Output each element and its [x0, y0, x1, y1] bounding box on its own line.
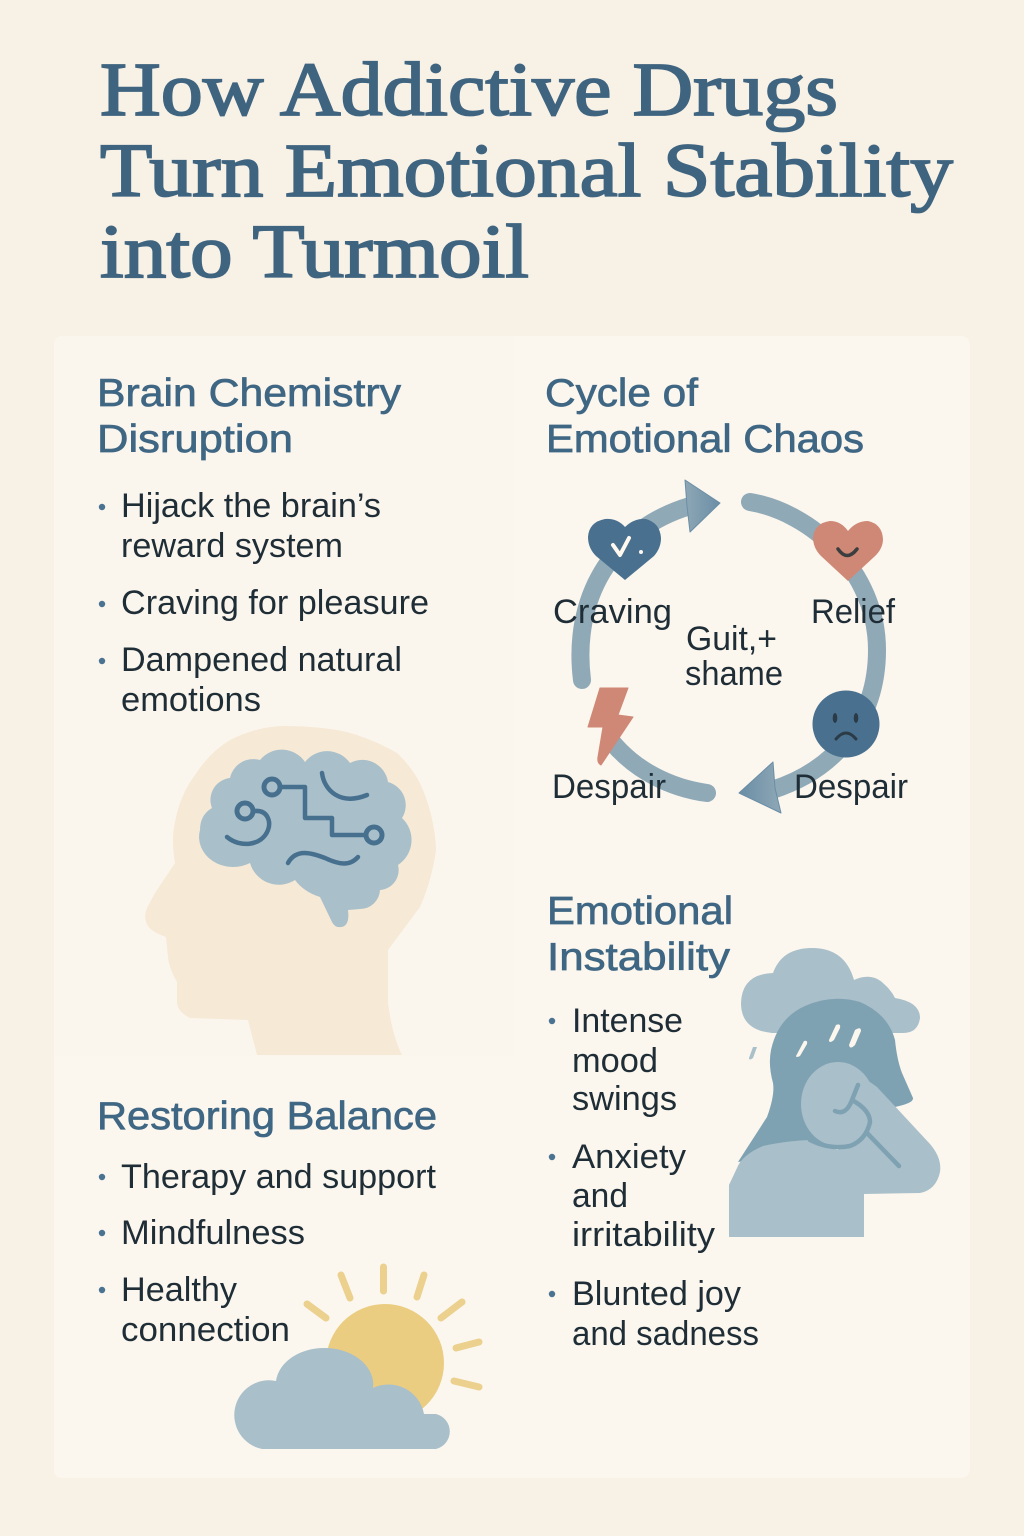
cycle labels: Relief	[811, 593, 896, 631]
cycle labels	[552, 593, 908, 806]
bullet list: brain chemistry	[99, 487, 429, 719]
heading: emotional instability: Emotional	[547, 890, 733, 933]
panel: emotional instability	[547, 890, 940, 1353]
bullet list: brain chemistry: emotions	[121, 681, 261, 719]
bullet list: emotional instability: irritability	[572, 1216, 715, 1254]
bullet list: restoring balance: Therapy and support	[121, 1158, 437, 1196]
bullet list: brain chemistry: Hijack the brain’s	[121, 487, 381, 525]
panel: brain chemistry disruption	[97, 372, 436, 1055]
cycle labels: Craving	[553, 593, 672, 631]
panel: background cards	[54, 336, 970, 1478]
bullet list: brain chemistry: Craving for pleasure	[121, 584, 429, 622]
hair and head	[738, 999, 913, 1162]
heading: emotional instability	[547, 890, 733, 979]
title	[100, 48, 953, 294]
bullet list: brain chemistry: reward system	[121, 527, 343, 565]
bullet list: brain chemistry: Dampened natural	[121, 641, 402, 679]
bullet list: emotional instability: swings	[572, 1080, 677, 1118]
title: How Addictive Drugs	[100, 48, 838, 132]
heading: restoring balance: Restoring Balance	[97, 1095, 437, 1138]
body and arm	[729, 1075, 940, 1237]
cycle labels: shame	[685, 655, 783, 693]
heading: emotional instability: Instability	[547, 936, 731, 979]
bullet list: emotional instability: and	[572, 1177, 628, 1215]
icon: lightning bolt	[588, 688, 633, 765]
bullet list: emotional instability: Anxiety	[572, 1138, 686, 1176]
arrow: right arc	[739, 502, 877, 813]
bullet list: emotional instability: Intense	[572, 1002, 683, 1040]
icon: sun behind cloud	[234, 1267, 479, 1449]
heading: brain chemistry disruption: Disruption	[97, 418, 293, 461]
icon: sad face	[812, 690, 880, 758]
panel: restoring balance	[97, 1095, 479, 1449]
heading: cycle of emotional chaos: Cycle of	[545, 372, 698, 415]
cloud	[741, 948, 920, 1033]
icon: blue heart with check	[588, 519, 661, 580]
bullet list: restoring balance: Mindfulness	[121, 1214, 305, 1252]
cycle labels: Guit,+	[686, 620, 777, 658]
cycle labels: Despair	[794, 768, 908, 806]
title: Turn Emotional Stability	[100, 129, 953, 213]
bullet list: emotional instability: Blunted joy	[572, 1275, 741, 1313]
cycle diagram	[552, 480, 908, 813]
bullet list: restoring balance: connection	[121, 1311, 290, 1349]
panel: cycle of emotional chaos	[545, 372, 908, 813]
bullet list: emotional instability: and sadness	[572, 1315, 759, 1353]
arrow: left upper arc	[580, 480, 720, 680]
icon: pink heart with smile	[813, 521, 883, 581]
title: into Turmoil	[100, 210, 529, 294]
raindrops	[749, 1024, 861, 1060]
arrow: lower-left arc	[612, 742, 707, 793]
brain	[199, 750, 412, 927]
hand	[801, 1062, 875, 1146]
heading: cycle of emotional chaos	[545, 372, 864, 461]
icon: head with brain circuits	[145, 726, 436, 1055]
brain circuit lines	[227, 773, 382, 864]
heading: brain chemistry disruption: Brain Chemistry	[97, 372, 402, 415]
heading: cycle of emotional chaos: Emotional Chaos	[546, 418, 864, 461]
bullet list: emotional instability: mood	[572, 1042, 658, 1080]
bullet list: restoring balance: Healthy	[121, 1271, 237, 1309]
bullet list: restoring balance	[99, 1158, 437, 1349]
icon: person under cloud	[729, 948, 940, 1237]
heading: brain chemistry disruption	[97, 372, 402, 461]
finger lines	[810, 1085, 899, 1166]
cycle labels: Despair	[552, 768, 666, 806]
bullet list: emotional instability	[549, 1002, 759, 1353]
